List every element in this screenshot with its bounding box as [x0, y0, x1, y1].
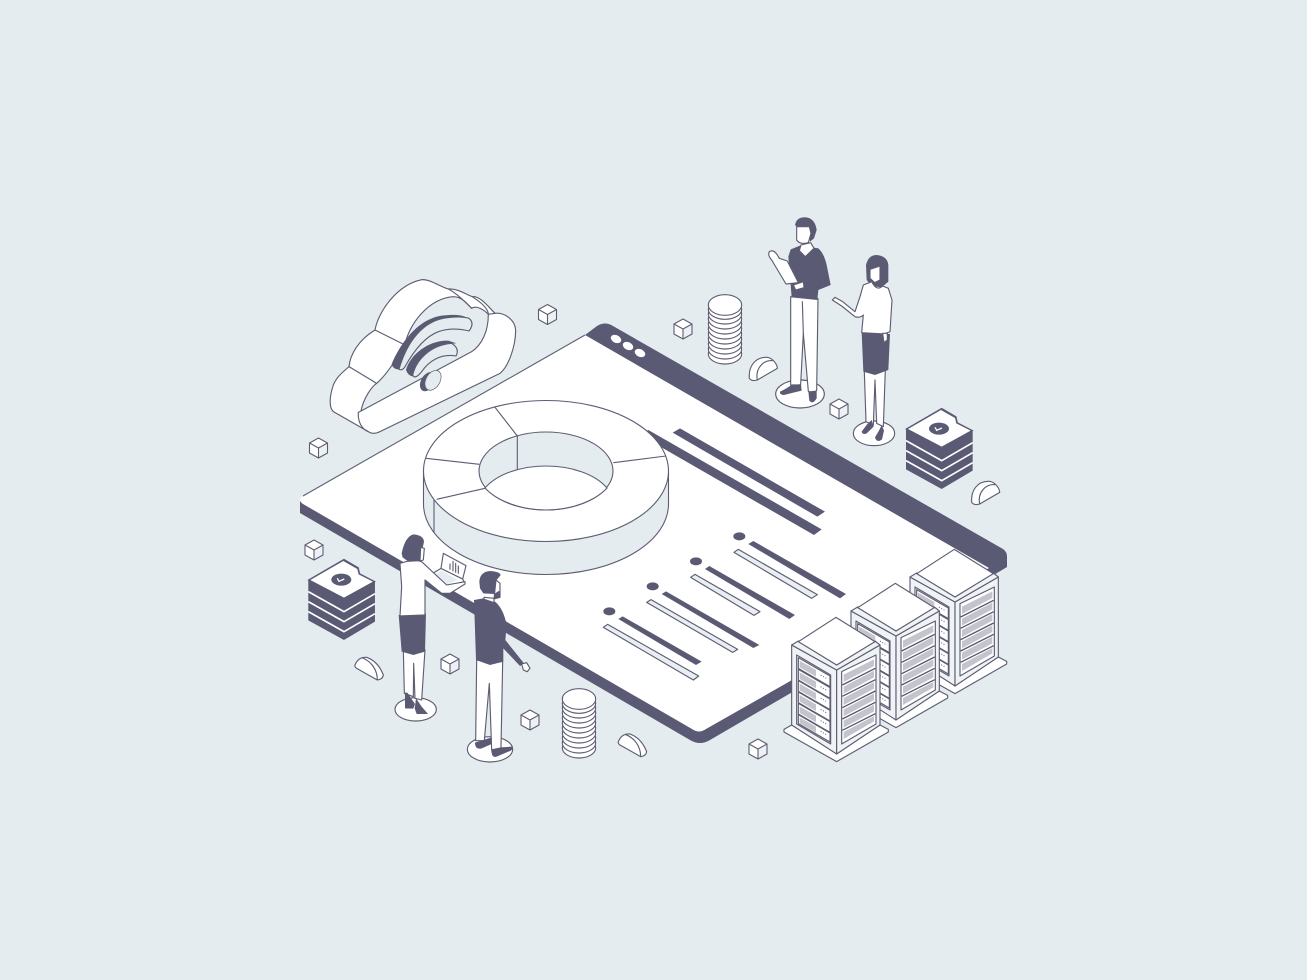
clipboard and hands — [769, 251, 798, 284]
window control dots — [609, 333, 647, 359]
head and hair — [479, 571, 501, 594]
head and hair — [795, 217, 817, 242]
hair — [402, 534, 424, 562]
blouse and arm — [832, 282, 892, 334]
hand — [522, 663, 530, 672]
icon: document stack left — [308, 559, 375, 640]
heels — [862, 420, 884, 441]
skirt — [862, 333, 890, 375]
trousers — [791, 297, 818, 392]
icon: cloud with wifi — [330, 280, 516, 433]
donut side wall — [424, 471, 668, 574]
hair — [866, 255, 888, 287]
icon: coin stack lower — [562, 689, 596, 758]
base disc — [776, 380, 824, 408]
heading bars — [640, 428, 825, 535]
donut chart — [424, 400, 668, 574]
panel outline — [303, 335, 585, 496]
icon: small cubes — [305, 304, 848, 759]
blouse and arm — [400, 561, 465, 616]
icon: document stack right — [906, 408, 973, 489]
icon: coin stack upper — [708, 295, 742, 364]
panel: dashboard window — [300, 324, 1007, 743]
sweater — [474, 598, 524, 666]
donut hole wall — [479, 432, 613, 510]
laptop — [430, 553, 466, 588]
person: woman with laptop — [395, 534, 466, 721]
shoes — [475, 737, 512, 757]
list item 4 — [733, 532, 846, 598]
wifi arcs — [392, 315, 472, 377]
cloud recessed face — [361, 297, 488, 411]
wifi dot — [417, 368, 444, 394]
list item 2 — [647, 582, 759, 652]
person: woman gesturing — [832, 255, 895, 446]
icon: half domes lower — [355, 657, 647, 757]
base disc — [467, 737, 513, 762]
person: man standing back — [467, 571, 530, 762]
cloud body — [330, 280, 516, 433]
base disc — [395, 698, 436, 721]
heels — [405, 693, 428, 714]
sweater — [788, 245, 831, 300]
face — [870, 266, 880, 283]
collar — [799, 243, 814, 257]
shoes — [780, 384, 817, 402]
legs — [864, 370, 885, 427]
trousers — [476, 660, 503, 750]
hand — [883, 333, 887, 343]
text placeholder bars — [603, 428, 846, 680]
legs — [403, 650, 425, 700]
donut top ring — [424, 400, 668, 542]
cloud edge lines — [349, 289, 495, 432]
donut segment lines — [426, 407, 666, 533]
panel side and header band — [300, 324, 1007, 743]
list item 1 — [603, 607, 702, 680]
list item 3 — [690, 557, 795, 619]
collar — [484, 597, 494, 603]
donut hole floor — [485, 466, 607, 510]
person: man with clipboard — [769, 217, 831, 408]
base disc — [853, 421, 895, 446]
server racks — [784, 549, 1007, 762]
icon: half domes upper — [749, 357, 1000, 505]
panel surface — [300, 335, 989, 732]
skirt — [399, 613, 426, 655]
